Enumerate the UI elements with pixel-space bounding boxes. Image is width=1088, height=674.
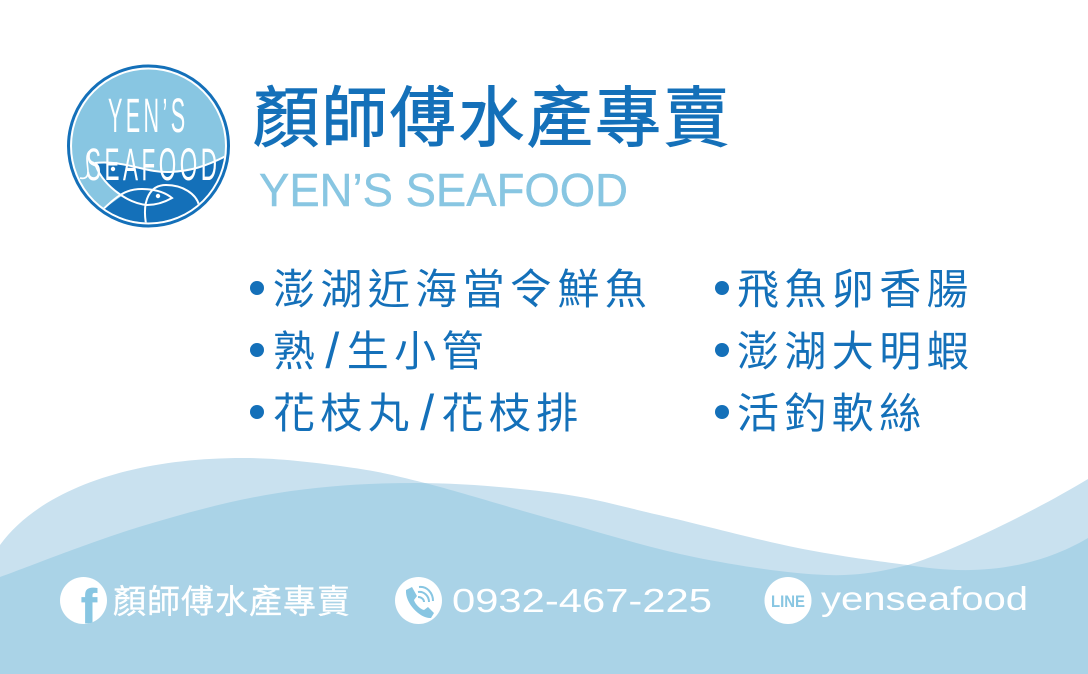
product list right column: 飛魚卵香腸 (737, 266, 974, 313)
icon: phone (395, 577, 442, 624)
product list left column: 花枝丸 (273, 390, 415, 437)
title: 顏師傅水產專賣 (253, 81, 732, 155)
icon: facebook (60, 577, 107, 624)
product list right column: 活釣軟絲 (737, 390, 927, 437)
product list right column: 澎湖大明蝦 (737, 328, 974, 375)
product list left column (250, 266, 652, 441)
product list left column: 生小管 (347, 328, 489, 375)
product list left column: / (420, 385, 440, 441)
product list left column: / (325, 323, 345, 379)
phone number: 0932-467-225 (452, 582, 712, 619)
product list left column: 花枝排 (442, 390, 584, 437)
background waves (0, 458, 1088, 674)
icon: facebook: f (81, 581, 98, 634)
subtitle: YEN’S SEAFOOD (259, 164, 628, 216)
logo: Yen's Seafood round badge: SEAFOOD (86, 140, 220, 190)
product list right column (715, 266, 974, 437)
logo wordmark: YEN’S (108, 88, 188, 142)
product list left column: 澎湖近海當令鮮魚 (273, 266, 652, 313)
icon: LINE (764, 577, 812, 624)
product list left column: 熟 (273, 328, 320, 375)
facebook page name: 顏師傅水產專賣 (113, 583, 351, 620)
icon: LINE: LINE (771, 592, 805, 611)
logo: Yen's Seafood round badge (67, 64, 230, 228)
LINE id: yenseafood (821, 580, 1028, 617)
